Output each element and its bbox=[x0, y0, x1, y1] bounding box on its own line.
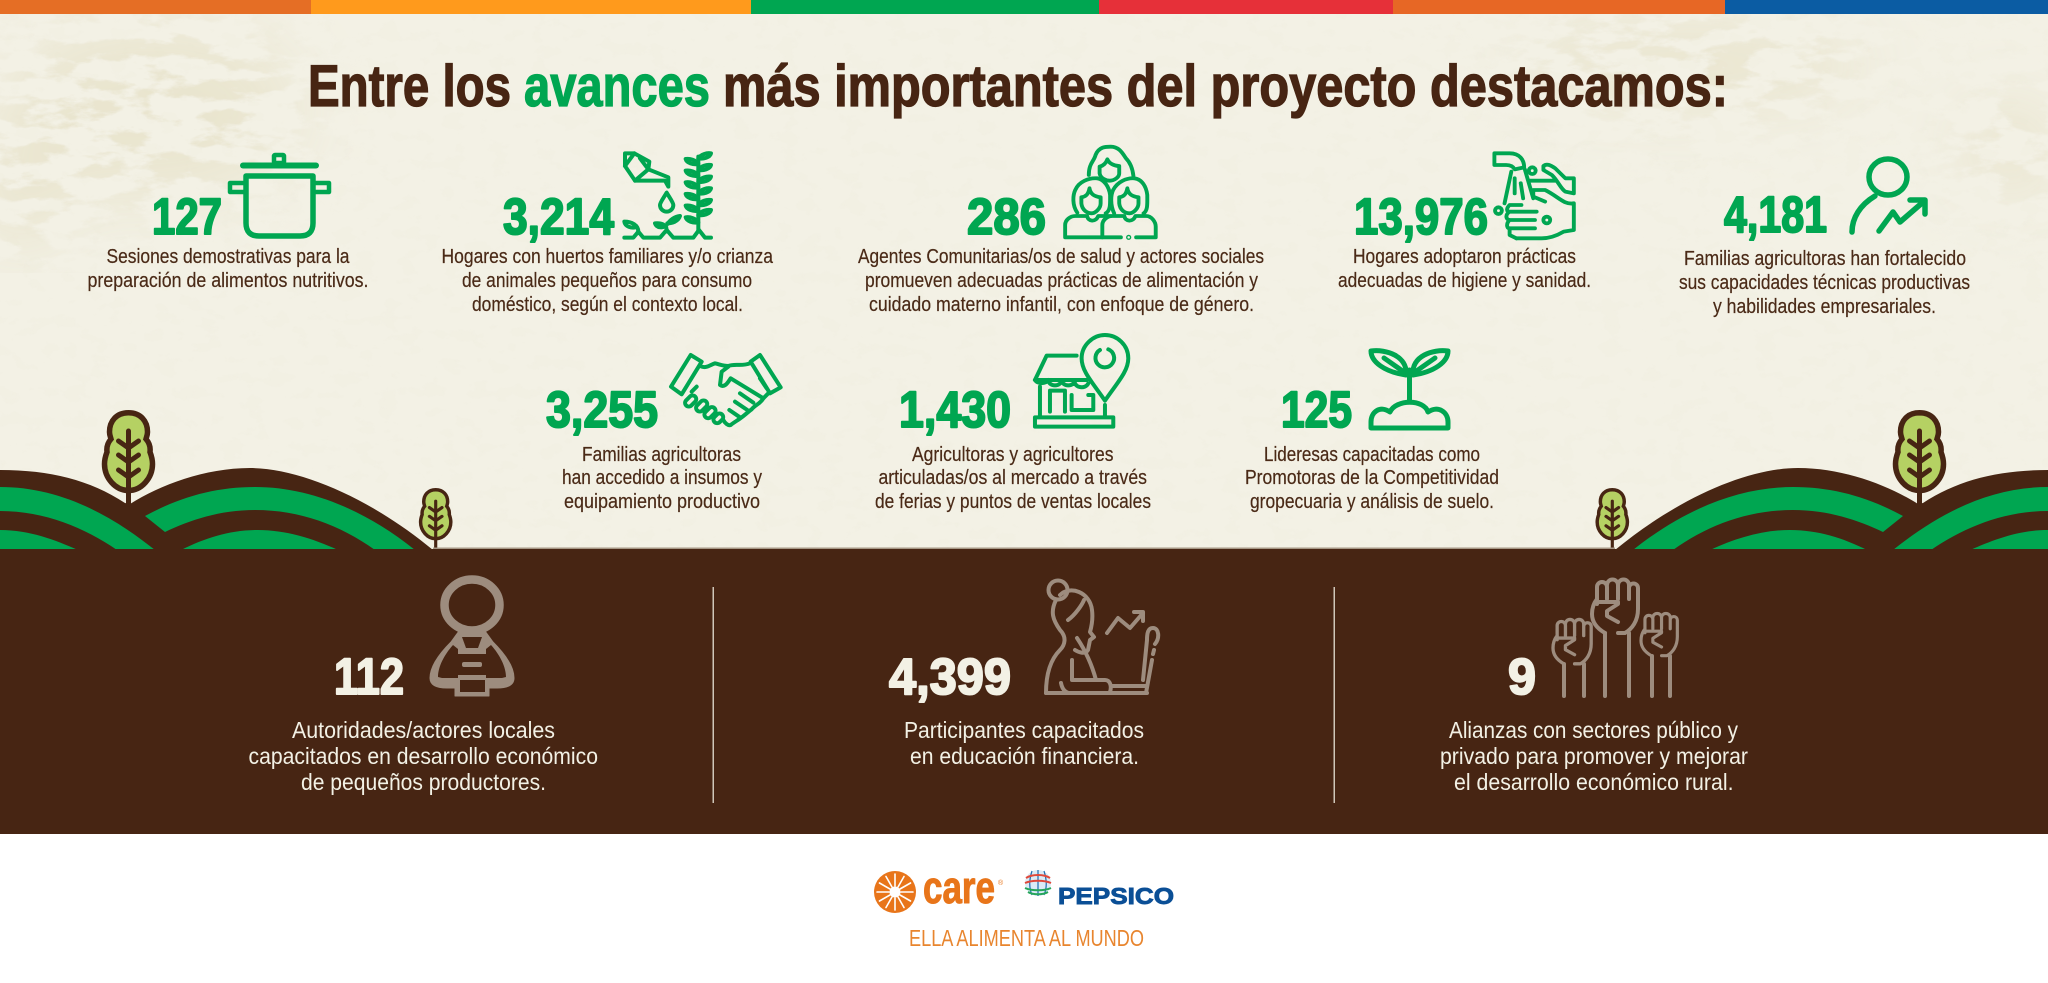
stat: 3,255 familias bbox=[546, 355, 781, 513]
divider bbox=[1334, 587, 1335, 803]
icon: CARE sunburst bbox=[874, 871, 916, 913]
description: Sesiones demostrativas para la bbox=[106, 245, 350, 268]
stat: 125 lideresas bbox=[1245, 351, 1499, 513]
description: Familias agricultoras bbox=[582, 443, 741, 466]
description bbox=[858, 245, 1264, 316]
description: articuladas/os al mercado a través bbox=[878, 466, 1147, 489]
description bbox=[1440, 717, 1748, 795]
logo: CARE: ® bbox=[998, 879, 1004, 887]
description: han accedido a insumos y bbox=[562, 466, 763, 489]
number 127: 127 bbox=[152, 188, 222, 245]
icon: small tree bbox=[421, 490, 451, 548]
description: Agentes Comunitarias/os de salud y actores sociales bbox=[858, 245, 1264, 268]
icon: large tree bbox=[1896, 413, 1944, 504]
description: el desarrollo económico rural. bbox=[1454, 769, 1734, 795]
description: Autoridades/actores locales bbox=[292, 717, 555, 743]
description bbox=[904, 717, 1144, 769]
title bbox=[308, 54, 1728, 119]
panel: footer bbox=[0, 834, 2048, 983]
icon: sprout bbox=[1371, 351, 1448, 428]
stat: 13,976 hogares bbox=[1338, 153, 1591, 292]
CARE wordmark: care bbox=[923, 862, 995, 913]
divider bbox=[712, 587, 714, 803]
description: capacitados en desarrollo económico bbox=[248, 743, 598, 769]
icon: watering can and plants bbox=[624, 153, 711, 238]
logo: CARE bbox=[874, 862, 1004, 913]
description bbox=[562, 443, 763, 513]
icon: woman at laptop bbox=[1046, 580, 1158, 693]
description bbox=[1245, 443, 1499, 513]
description: Familias agricultoras han fortalecido bbox=[1684, 247, 1966, 270]
icon: washing hands bbox=[1494, 153, 1574, 238]
number 3,255: 3,255 bbox=[546, 381, 658, 438]
stat: 1,430 agricultoras bbox=[875, 335, 1151, 513]
stat: 3,214 hogares bbox=[442, 153, 774, 316]
stat: 112 autoridades bbox=[248, 580, 598, 795]
description: gropecuaria y análisis de suelo. bbox=[1250, 490, 1494, 513]
description: adecuadas de higiene y sanidad. bbox=[1338, 269, 1591, 292]
icon: pot bbox=[230, 155, 329, 236]
number 1,430: 1,430 bbox=[899, 381, 1011, 438]
stat: 9 alianzas bbox=[1440, 580, 1748, 795]
description: doméstico, según el contexto local. bbox=[472, 293, 743, 316]
description bbox=[1338, 245, 1591, 292]
title: avances bbox=[524, 54, 710, 119]
icon: store and location pin bbox=[1035, 335, 1128, 427]
description: sus capacidades técnicas productivas bbox=[1679, 271, 1970, 294]
description: equipamiento productivo bbox=[564, 490, 760, 513]
description: Alianzas con sectores público y bbox=[1449, 717, 1738, 743]
background texture bbox=[0, 14, 2048, 248]
description: en educación financiera. bbox=[910, 743, 1139, 769]
number 9: 9 bbox=[1508, 648, 1536, 705]
number 3,214: 3,214 bbox=[503, 188, 615, 245]
icon: person with rising arrow bbox=[1852, 159, 1925, 232]
left hills and trees bbox=[0, 413, 451, 550]
number 112: 112 bbox=[334, 648, 404, 705]
tagline: ELLA ALIMENTA AL MUNDO bbox=[909, 925, 1144, 951]
description: Lideresas capacitadas como bbox=[1264, 443, 1480, 466]
description bbox=[875, 443, 1151, 513]
description bbox=[88, 245, 368, 292]
number 286: 286 bbox=[967, 188, 1046, 245]
PepsiCo wordmark: PEPSICO bbox=[1058, 883, 1174, 909]
icon: raised fists bbox=[1553, 580, 1677, 696]
number 125: 125 bbox=[1281, 381, 1352, 438]
logo: PepsiCo bbox=[1025, 870, 1174, 909]
description: Hogares con huertos familiares y/o crianza bbox=[442, 245, 774, 268]
top colour stripe bbox=[0, 0, 2048, 14]
stat: 127 sesiones bbox=[88, 155, 368, 292]
description: y habilidades empresariales. bbox=[1713, 295, 1936, 318]
right hills and trees bbox=[1597, 413, 2048, 550]
description bbox=[248, 717, 598, 795]
description: de animales pequeños para consumo bbox=[462, 269, 752, 292]
icon: globe bbox=[1025, 870, 1051, 896]
hills bbox=[0, 468, 433, 550]
icon: small tree bbox=[1597, 490, 1627, 548]
icon: person with badge bbox=[430, 580, 514, 696]
description: de ferias y puntos de ventas locales bbox=[875, 490, 1151, 513]
description: de pequeños productores. bbox=[301, 769, 546, 795]
panel: brown band bbox=[0, 549, 2048, 834]
description: Participantes capacitados bbox=[904, 717, 1144, 743]
title: Entre los bbox=[308, 54, 511, 119]
stat: 286 agentes bbox=[858, 147, 1264, 316]
description bbox=[1679, 247, 1970, 318]
description: privado para promover y mejorar bbox=[1440, 743, 1748, 769]
description bbox=[442, 245, 774, 316]
description: cuidado materno infantil, con enfoque de género. bbox=[869, 293, 1254, 316]
description: preparación de alimentos nutritivos. bbox=[88, 269, 368, 292]
icon: handshake bbox=[671, 355, 781, 425]
description: Agricultoras y agricultores bbox=[912, 443, 1114, 466]
title: más importantes del proyecto destacamos: bbox=[723, 54, 1728, 119]
description: Promotoras de la Competitividad bbox=[1245, 466, 1499, 489]
icon: large tree bbox=[104, 413, 152, 504]
description: promueven adecuadas prácticas de alimentación y bbox=[865, 269, 1259, 292]
number 4,181: 4,181 bbox=[1724, 186, 1827, 243]
icon: three women bbox=[1065, 147, 1156, 238]
description: Hogares adoptaron prácticas bbox=[1353, 245, 1576, 268]
stat: 4,399 participantes bbox=[889, 580, 1158, 769]
hills bbox=[1615, 468, 2048, 550]
stat: 4,181 familias bbox=[1679, 159, 1970, 318]
number 13,976: 13,976 bbox=[1354, 188, 1488, 245]
number 4,399: 4,399 bbox=[889, 648, 1011, 705]
